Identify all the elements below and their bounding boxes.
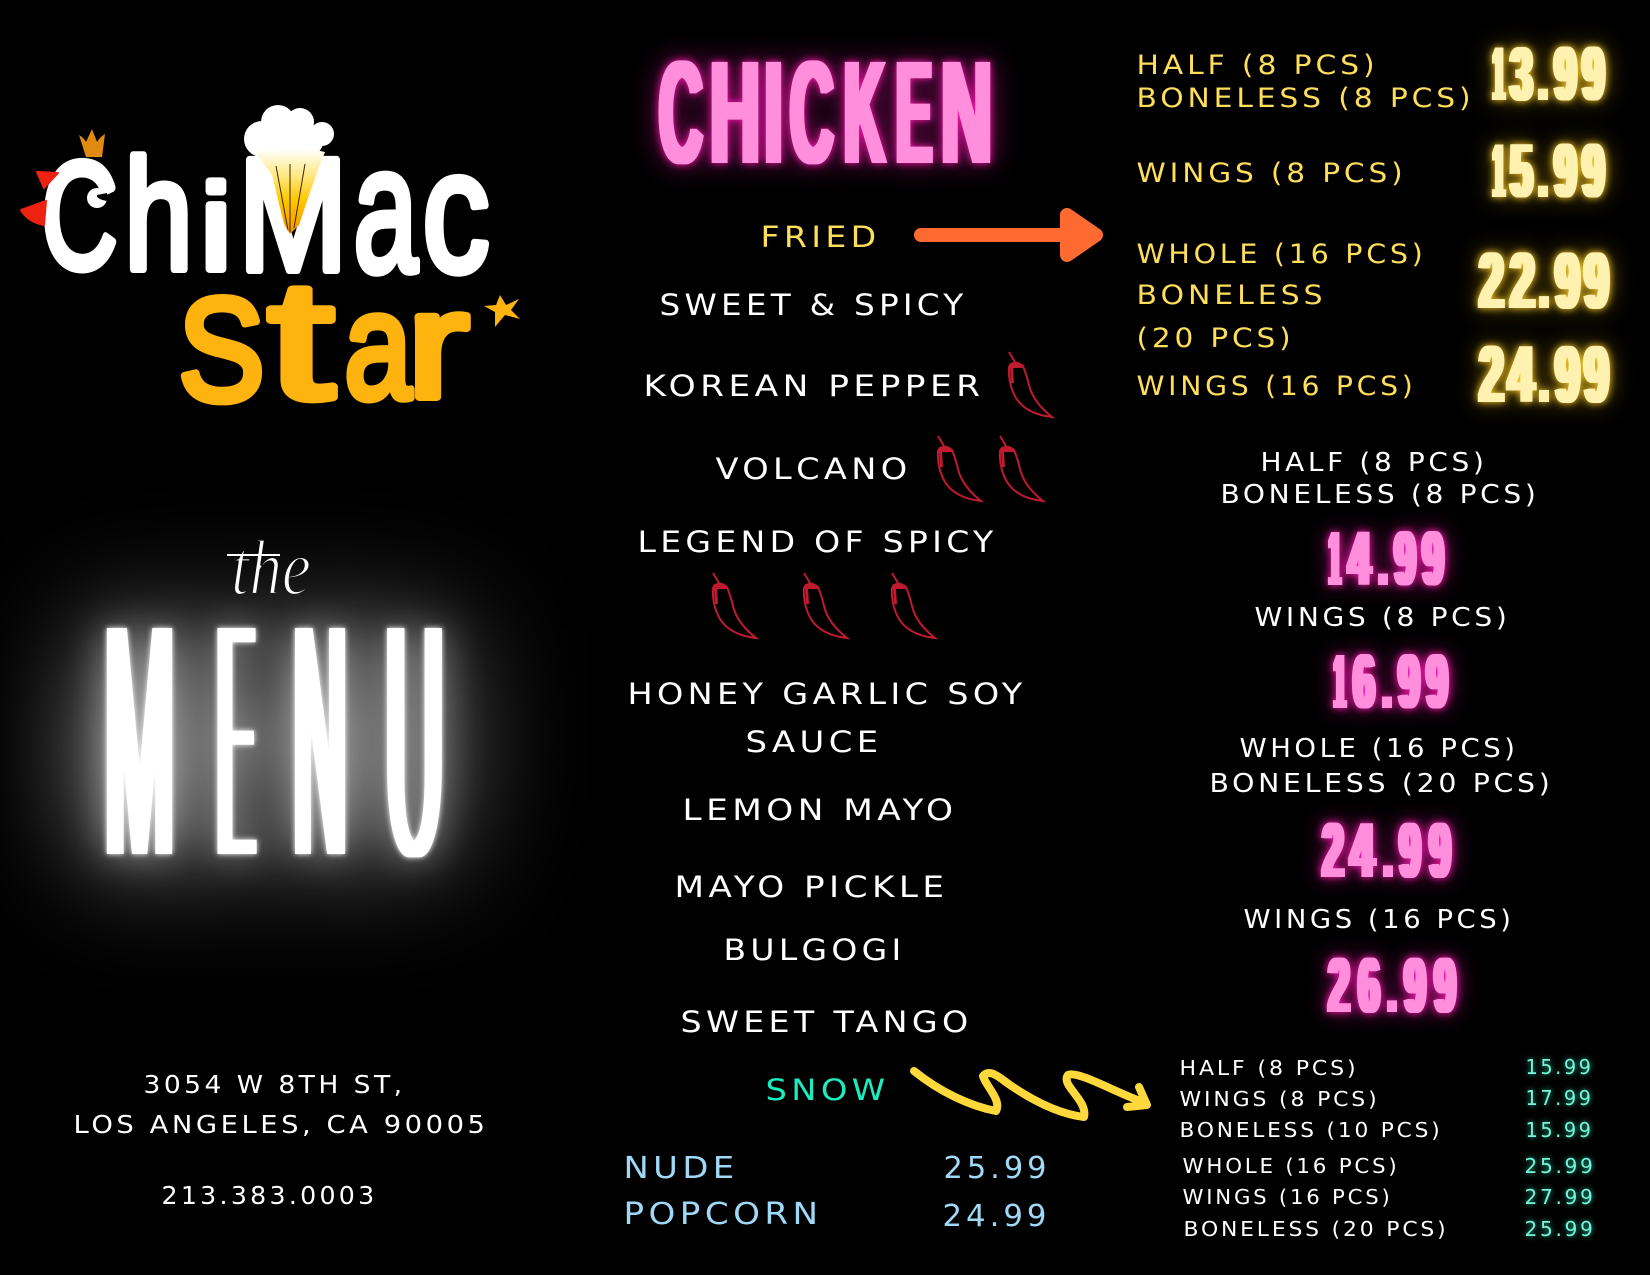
fried prices: 9	[1554, 129, 1576, 214]
heading: MENU: E	[218, 548, 254, 934]
sauced prices: 2	[1328, 941, 1350, 1029]
snow labels: HALF (8 PCS)	[1180, 1056, 1358, 1080]
heading: CHICKEN: I	[764, 31, 782, 195]
fried labels	[1136, 50, 1474, 402]
sauced prices: .	[1388, 941, 1396, 1029]
fried prices: 1	[1494, 32, 1504, 117]
logo word: ChiMac: c	[422, 114, 490, 308]
address line 2: LOS ANGELES, CA 90005	[74, 1110, 488, 1139]
flavor: korean pepper: KOREAN PEPPER	[644, 369, 984, 403]
snow labels	[1180, 1056, 1448, 1241]
sauced labels: BONELESS (8 PCS)	[1220, 480, 1540, 510]
sauced prices	[1322, 516, 1456, 1029]
sauced prices: .	[1384, 806, 1392, 894]
flavor: honey garlic soy sauce: HONEY GARLIC SOY	[628, 677, 1026, 711]
fried prices: 2	[1479, 330, 1504, 420]
icon: star	[484, 295, 520, 327]
fried prices: 9	[1584, 236, 1609, 325]
heading: MENU: N	[294, 548, 346, 934]
icon: eye	[87, 188, 107, 208]
text: U	[386, 548, 443, 934]
icon: two chilis	[938, 436, 1043, 501]
fried prices: 1	[1494, 129, 1504, 214]
text: N	[941, 31, 992, 195]
arrow: snow to prices	[914, 1071, 1147, 1117]
sauced prices: 9	[1426, 639, 1448, 725]
logo word: Star: t	[268, 246, 334, 434]
snow labels: WINGS (16 PCS)	[1182, 1185, 1392, 1209]
icon: comb	[21, 172, 58, 225]
icon: beer foam	[244, 105, 334, 157]
sauced prices: 9	[1400, 806, 1420, 894]
nude label: NUDE	[624, 1151, 738, 1186]
phone number: 213.383.0003	[162, 1181, 378, 1210]
sauced labels: WHOLE (16 PCS)	[1240, 734, 1518, 764]
heading: CHICKEN: H	[710, 31, 760, 195]
heading: CHICKEN: E	[896, 31, 932, 195]
sauced prices: 9	[1430, 806, 1450, 894]
sauced prices: .	[1379, 516, 1387, 602]
sauced prices: 9	[1404, 941, 1426, 1029]
logo word: ChiMac: a	[354, 109, 418, 309]
fried labels: (20 PCS)	[1136, 323, 1294, 354]
snow prices	[1524, 1055, 1596, 1241]
heading: the: the	[231, 524, 311, 611]
flavor: sweet tango: SWEET TANGO	[680, 1005, 972, 1039]
popcorn label: POPCORN	[624, 1197, 822, 1232]
logo word: ChiMac: M	[238, 125, 348, 304]
logo word: ChiMac: C	[42, 131, 118, 301]
snow labels: WHOLE (16 PCS)	[1182, 1154, 1400, 1178]
snow prices: 27.99	[1524, 1185, 1596, 1209]
sauced prices: .	[1383, 639, 1391, 725]
price list: snow	[1180, 1055, 1596, 1241]
heading: CHICKEN: C	[790, 31, 834, 195]
fried prices: 9	[1555, 330, 1580, 420]
sauced prices: 1	[1330, 516, 1340, 602]
snow prices: 15.99	[1526, 1055, 1594, 1079]
fried labels: WINGS (16 PCS)	[1136, 371, 1416, 402]
heading: the MENU	[105, 524, 443, 934]
flavor: mayo pickle: MAYO PICKLE	[674, 870, 948, 904]
fried labels: BONELESS	[1136, 280, 1326, 311]
flavor: fried: FRIED	[760, 220, 880, 254]
flavor list	[628, 215, 1096, 1107]
heading: CHICKEN: C	[659, 31, 702, 195]
logo word: Star: S	[178, 268, 264, 431]
popcorn price: 24.99	[942, 1199, 1050, 1234]
icon: three chilis	[713, 573, 935, 638]
snow prices: 17.99	[1526, 1086, 1594, 1110]
fried prices: .	[1540, 330, 1548, 420]
flavor: sweet and spicy: SWEET & SPICY	[660, 288, 968, 322]
fried labels: WHOLE (16 PCS)	[1136, 239, 1426, 270]
fried prices	[1479, 32, 1609, 420]
flavor: lemon mayo: LEMON MAYO	[682, 793, 958, 827]
fried prices: 4	[1508, 330, 1534, 420]
fried labels: WINGS (8 PCS)	[1136, 158, 1406, 189]
sauced prices: 1	[1335, 639, 1345, 725]
sauced labels: WINGS (8 PCS)	[1254, 603, 1510, 633]
flavor: legend of spicy: LEGEND OF SPICY	[638, 525, 998, 559]
sauced prices: 2	[1322, 806, 1344, 894]
snow prices: 25.99	[1524, 1217, 1596, 1241]
sauced labels	[1210, 448, 1554, 935]
snow labels: BONELESS (20 PCS)	[1184, 1217, 1448, 1241]
snow labels: WINGS (8 PCS)	[1180, 1087, 1380, 1111]
fried prices: .	[1539, 32, 1547, 117]
sauced prices: 4	[1350, 806, 1374, 894]
flavor: bulgogi: BULGOGI	[724, 933, 906, 967]
price list: fried	[1136, 32, 1609, 420]
address block	[74, 1070, 488, 1210]
logo word: Star: r	[407, 260, 469, 430]
address line 1: 3054 W 8TH ST,	[144, 1070, 406, 1099]
heading: MENU: M	[105, 548, 174, 934]
nude and popcorn prices	[624, 1151, 1050, 1234]
fried prices: 9	[1555, 236, 1580, 325]
snow labels: BONELESS (10 PCS)	[1180, 1118, 1442, 1142]
sauced labels: WINGS (16 PCS)	[1244, 905, 1514, 935]
flavor: honey garlic soy sauce: SAUCE	[746, 725, 882, 759]
fried prices: 9	[1584, 330, 1609, 420]
sauced labels: HALF (8 PCS)	[1260, 448, 1488, 478]
fried prices: .	[1540, 236, 1548, 325]
flavor: snow: SNOW	[766, 1073, 890, 1107]
fried prices: 5	[1510, 129, 1532, 214]
logo word: ChiMac: i	[201, 159, 231, 295]
sauced prices: 9	[1398, 639, 1420, 725]
fried prices: 2	[1479, 236, 1504, 325]
fried prices: 2	[1510, 236, 1535, 325]
sauced labels: BONELESS (20 PCS)	[1210, 769, 1554, 799]
flavor: volcano: VOLCANO	[716, 452, 912, 486]
arrow: fried to prices	[921, 215, 1096, 255]
sauced prices: 6	[1354, 639, 1374, 725]
heading: CHICKEN: K	[844, 31, 885, 195]
nude price: 25.99	[944, 1151, 1050, 1186]
sauced prices: 4	[1348, 516, 1370, 602]
logo word: ChiMac: h	[124, 128, 192, 303]
fried prices: 9	[1582, 129, 1604, 214]
logo word: Star: a	[344, 261, 412, 431]
price list: sauced	[1210, 448, 1554, 1029]
snow prices: 25.99	[1524, 1154, 1596, 1178]
fried labels: HALF (8 PCS)	[1136, 50, 1378, 81]
sauced prices: 6	[1358, 941, 1380, 1029]
fried prices: 9	[1554, 32, 1576, 117]
sauced prices: 9	[1422, 516, 1444, 602]
fried labels: BONELESS (8 PCS)	[1136, 83, 1474, 114]
fried prices: 9	[1582, 32, 1604, 117]
icon: chili	[1009, 352, 1052, 417]
sauced prices: 9	[1394, 516, 1416, 602]
fried prices: .	[1539, 129, 1547, 214]
icon: beer glass	[256, 149, 325, 234]
icon: crown	[79, 129, 105, 157]
price list: sauced: 9	[1434, 941, 1456, 1029]
snow prices: 15.99	[1526, 1118, 1594, 1142]
logo: ChiMac Star	[21, 105, 520, 434]
fried prices: 3	[1510, 32, 1532, 117]
flavor: honey garlic soy sauce	[628, 677, 1026, 759]
